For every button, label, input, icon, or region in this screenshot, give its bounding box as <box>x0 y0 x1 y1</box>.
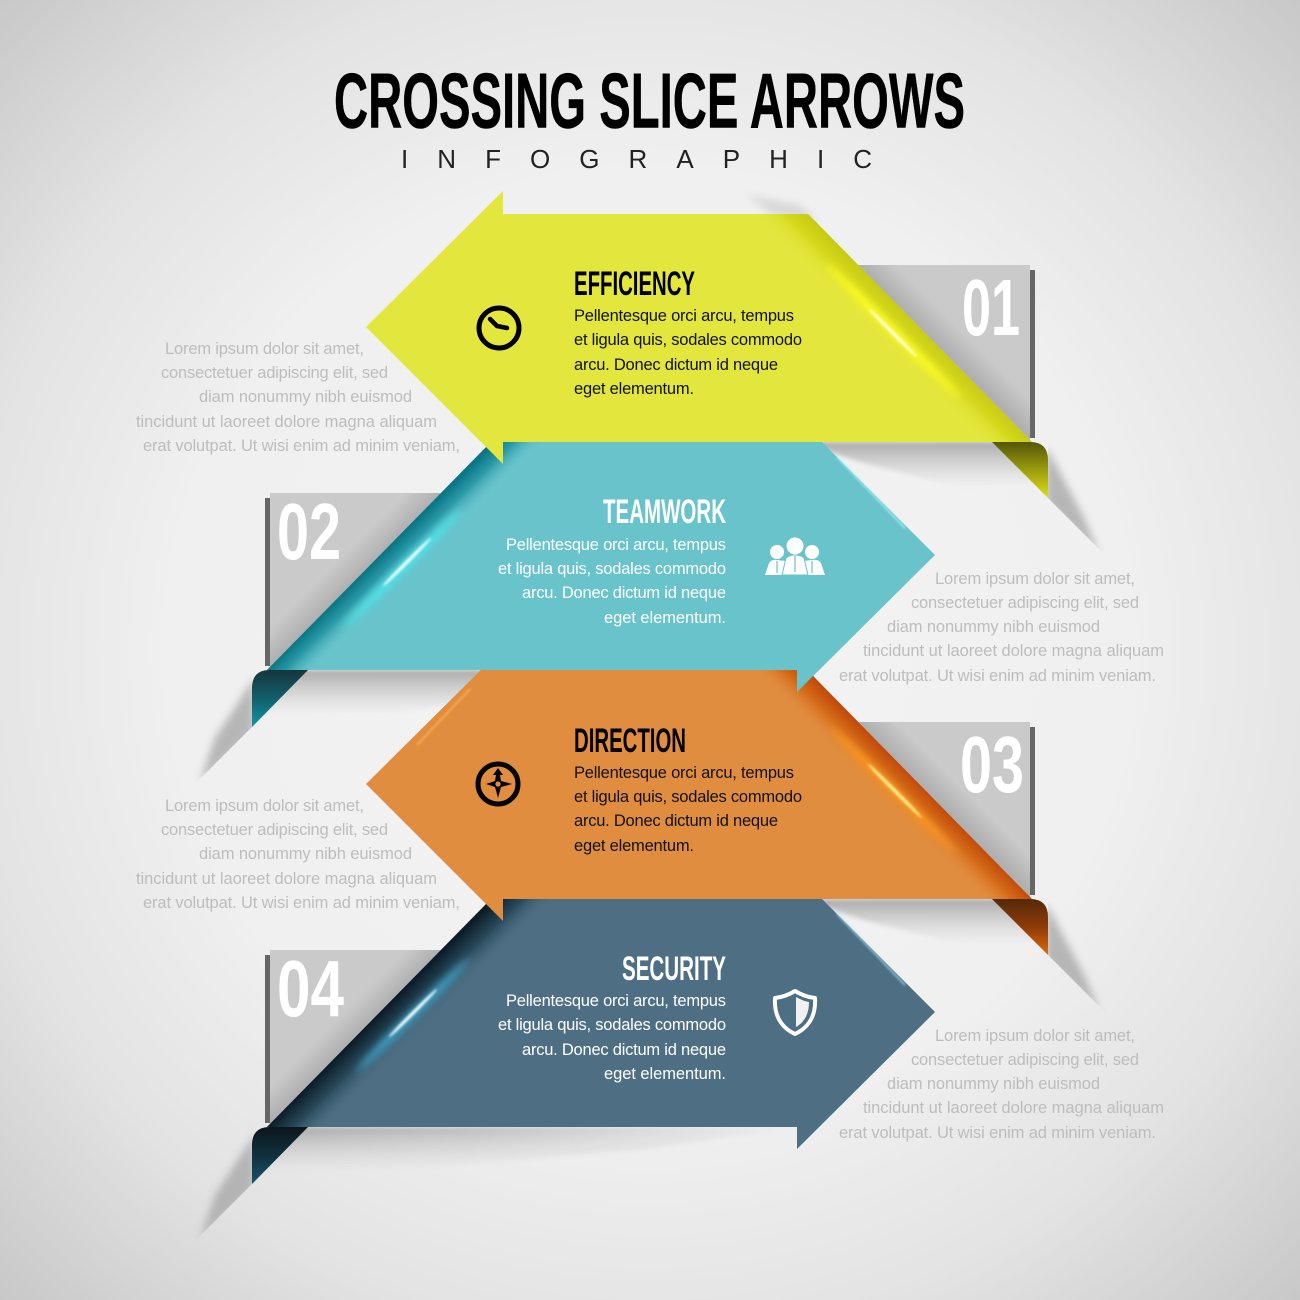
teal arrow body <box>267 442 935 692</box>
body text: security: et ligula quis, sodales commodo <box>498 1016 726 1034</box>
side text: block 3: consectetuer adipiscing elit, sed <box>161 821 388 839</box>
side text: block 4: diam nonummy nibh euismod <box>887 1075 1100 1093</box>
body text: security <box>498 992 726 1083</box>
orange arrow body <box>366 648 1032 921</box>
body text: efficiency <box>574 307 802 398</box>
body text: efficiency: et ligula quis, sodales commodo <box>574 331 802 349</box>
infographic canvas <box>136 72 1163 1234</box>
body text: direction: eget elementum. <box>574 837 694 855</box>
side text: block 2 <box>839 570 1164 685</box>
subtitle: INFOGRAPHIC <box>401 144 872 174</box>
panel: direction arrow <box>366 648 1048 955</box>
side text: block 4: consectetuer adipiscing elit, sed <box>911 1051 1139 1069</box>
panel: teamwork arrow <box>252 442 935 727</box>
teal fold <box>252 670 308 727</box>
body text: teamwork: Pellentesque orci arcu, tempus <box>506 536 726 554</box>
number tab 04: 04 <box>277 944 344 1033</box>
side text: block 1: Lorem ipsum dolor sit amet, <box>165 340 364 358</box>
navy arrow body <box>267 899 935 1149</box>
yellow fold <box>992 442 1048 498</box>
body text: direction: et ligula quis, sodales commodo <box>574 788 802 806</box>
side text: block 2: tincidunt ut laoreet dolore magna aliquam <box>863 642 1164 660</box>
heading: direction: DIRECTION <box>574 722 686 760</box>
body text: direction <box>574 764 802 855</box>
side text: block 1: consectetuer adipiscing elit, sed <box>161 364 388 382</box>
icon: team <box>765 538 825 575</box>
icon: shield <box>775 991 815 1034</box>
heading: teamwork: TEAMWORK <box>603 493 726 531</box>
side text: block 1: diam nonummy nibh euismod <box>199 388 412 406</box>
side text: block 1 <box>136 340 460 455</box>
body text: efficiency: arcu. Donec dictum id neque <box>574 356 778 374</box>
number tab 04 <box>265 944 441 1127</box>
yellow arrow body <box>366 191 1032 464</box>
body text: direction: arcu. Donec dictum id neque <box>574 812 778 830</box>
heading: efficiency: EFFICIENCY <box>574 265 695 303</box>
side text: block 1: erat volutpat. Ut wisi enim ad minim veniam, <box>143 437 460 455</box>
side text: block 2: erat volutpat. Ut wisi enim ad minim veniam. <box>839 667 1156 685</box>
icon: clock <box>479 308 519 348</box>
number tab 03: 03 <box>960 720 1024 809</box>
side text: block 1: tincidunt ut laoreet dolore magna aliquam <box>136 413 437 431</box>
side text: block 4 <box>839 1027 1164 1142</box>
number tab 01 <box>858 263 1035 442</box>
side text: block 3: diam nonummy nibh euismod <box>199 845 412 863</box>
body text: teamwork: eget elementum. <box>604 609 726 627</box>
side text: block 4: Lorem ipsum dolor sit amet, <box>935 1027 1135 1045</box>
side text: block 3: erat volutpat. Ut wisi enim ad minim veniam, <box>143 894 460 912</box>
number tab 02 <box>265 487 441 670</box>
side text: block 4: tincidunt ut laoreet dolore magna aliquam <box>863 1099 1164 1117</box>
side text: block 4: erat volutpat. Ut wisi enim ad minim veniam. <box>839 1124 1156 1142</box>
body text: efficiency: Pellentesque orci arcu, tempus <box>574 307 794 325</box>
body text: security: Pellentesque orci arcu, tempus <box>506 992 726 1010</box>
body text: efficiency: eget elementum. <box>574 380 694 398</box>
heading: security: SECURITY <box>622 950 726 988</box>
panel: security arrow <box>252 899 935 1184</box>
side text: block 2: consectetuer adipiscing elit, sed <box>911 594 1139 612</box>
side text: block 2: Lorem ipsum dolor sit amet, <box>935 570 1135 588</box>
side text: block 3: Lorem ipsum dolor sit amet, <box>165 797 364 815</box>
body text: teamwork: et ligula quis, sodales commodo <box>498 560 726 578</box>
number tab 01: 01 <box>962 263 1020 352</box>
body text: security: eget elementum. <box>604 1065 726 1083</box>
cast shadows behind the arrows <box>200 195 1100 1239</box>
body text: direction: Pellentesque orci arcu, tempus <box>574 764 794 782</box>
side text: block 3 <box>136 797 460 912</box>
number tab 02: 02 <box>277 487 341 576</box>
body text: teamwork: arcu. Donec dictum id neque <box>522 584 726 602</box>
body text: teamwork <box>498 536 726 627</box>
icon: compass <box>478 764 518 804</box>
panel: efficiency arrow <box>366 191 1048 498</box>
navy fold <box>252 1127 308 1184</box>
number tab 03 <box>858 720 1035 899</box>
orange fold <box>992 899 1048 955</box>
side text: block 2: diam nonummy nibh euismod <box>887 618 1100 636</box>
side text: block 3: tincidunt ut laoreet dolore magna aliquam <box>136 870 437 888</box>
body text: security: arcu. Donec dictum id neque <box>522 1041 726 1059</box>
